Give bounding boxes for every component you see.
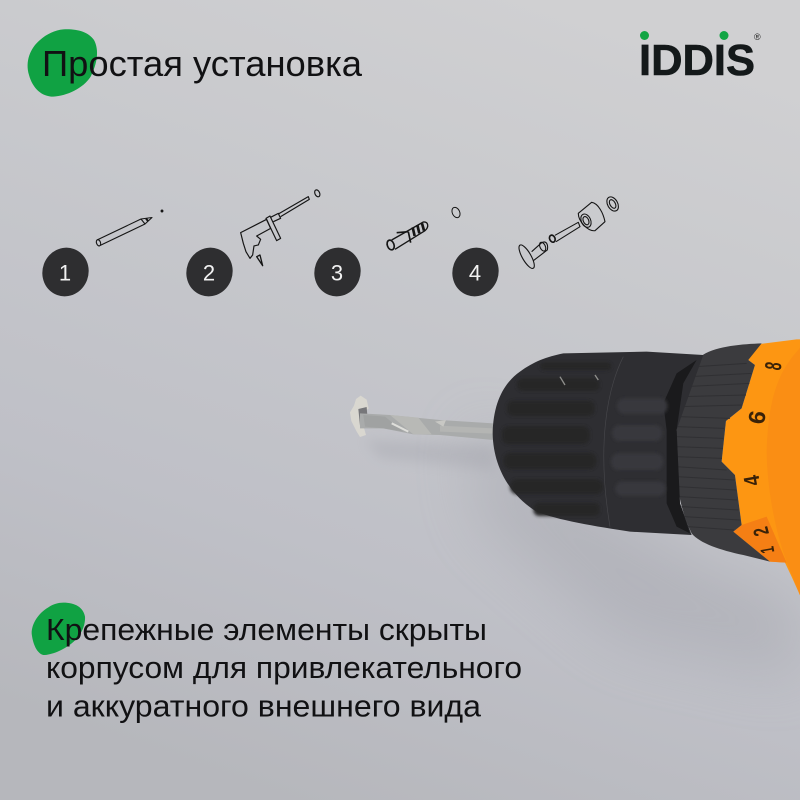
icon: wall plug	[386, 222, 428, 251]
description text	[46, 613, 522, 724]
chuck seam and scuffs	[560, 357, 623, 527]
description text: корпусом для привлекательного	[46, 651, 522, 685]
registered mark: ®	[754, 32, 761, 42]
icon: mounting hardware	[516, 195, 621, 270]
step 3 badge	[308, 241, 367, 303]
torque numbers: 8	[761, 360, 788, 372]
step 2 badge: 2	[203, 260, 215, 286]
drill shadow on wall	[365, 420, 800, 680]
green blob behind title	[28, 29, 97, 97]
torque numbers	[740, 360, 788, 555]
icon: hammer drill	[241, 189, 321, 266]
title: Простая установка	[42, 43, 363, 84]
step 1 badge	[36, 241, 95, 303]
drill chuck	[493, 352, 703, 535]
drill knurled collar	[675, 343, 770, 562]
step 4 badge	[446, 241, 505, 303]
icon: pencil	[96, 210, 163, 246]
drill orange body shade	[733, 517, 787, 563]
logo green dots	[640, 31, 728, 40]
green blob behind description	[32, 603, 85, 655]
step 2 badge	[180, 241, 239, 303]
drilled hole	[350, 396, 369, 437]
cordless drill	[493, 339, 800, 597]
torque numbers: 4	[740, 473, 765, 488]
step 1 badge: 1	[59, 260, 71, 286]
chuck rear grips	[611, 398, 667, 496]
torque numbers: 1	[758, 545, 779, 555]
chuck rear groove	[663, 360, 697, 533]
description text: и аккуратного внешнего вида	[46, 690, 481, 724]
drill orange rear section	[767, 347, 800, 597]
torque numbers: 2	[748, 524, 774, 539]
description text: Крепежные элементы скрыты	[46, 613, 487, 647]
step 4 badge: 4	[469, 260, 481, 286]
drill chuck ribs	[502, 362, 612, 516]
drill orange body	[722, 339, 800, 597]
logo wordmark: IDDIS	[639, 37, 755, 85]
step 3 badge: 3	[331, 260, 343, 286]
icon: hole mark for plug	[450, 206, 462, 219]
torque numbers: 6	[743, 409, 771, 426]
logo: IDDIS	[639, 31, 761, 85]
drill bit	[360, 413, 493, 440]
